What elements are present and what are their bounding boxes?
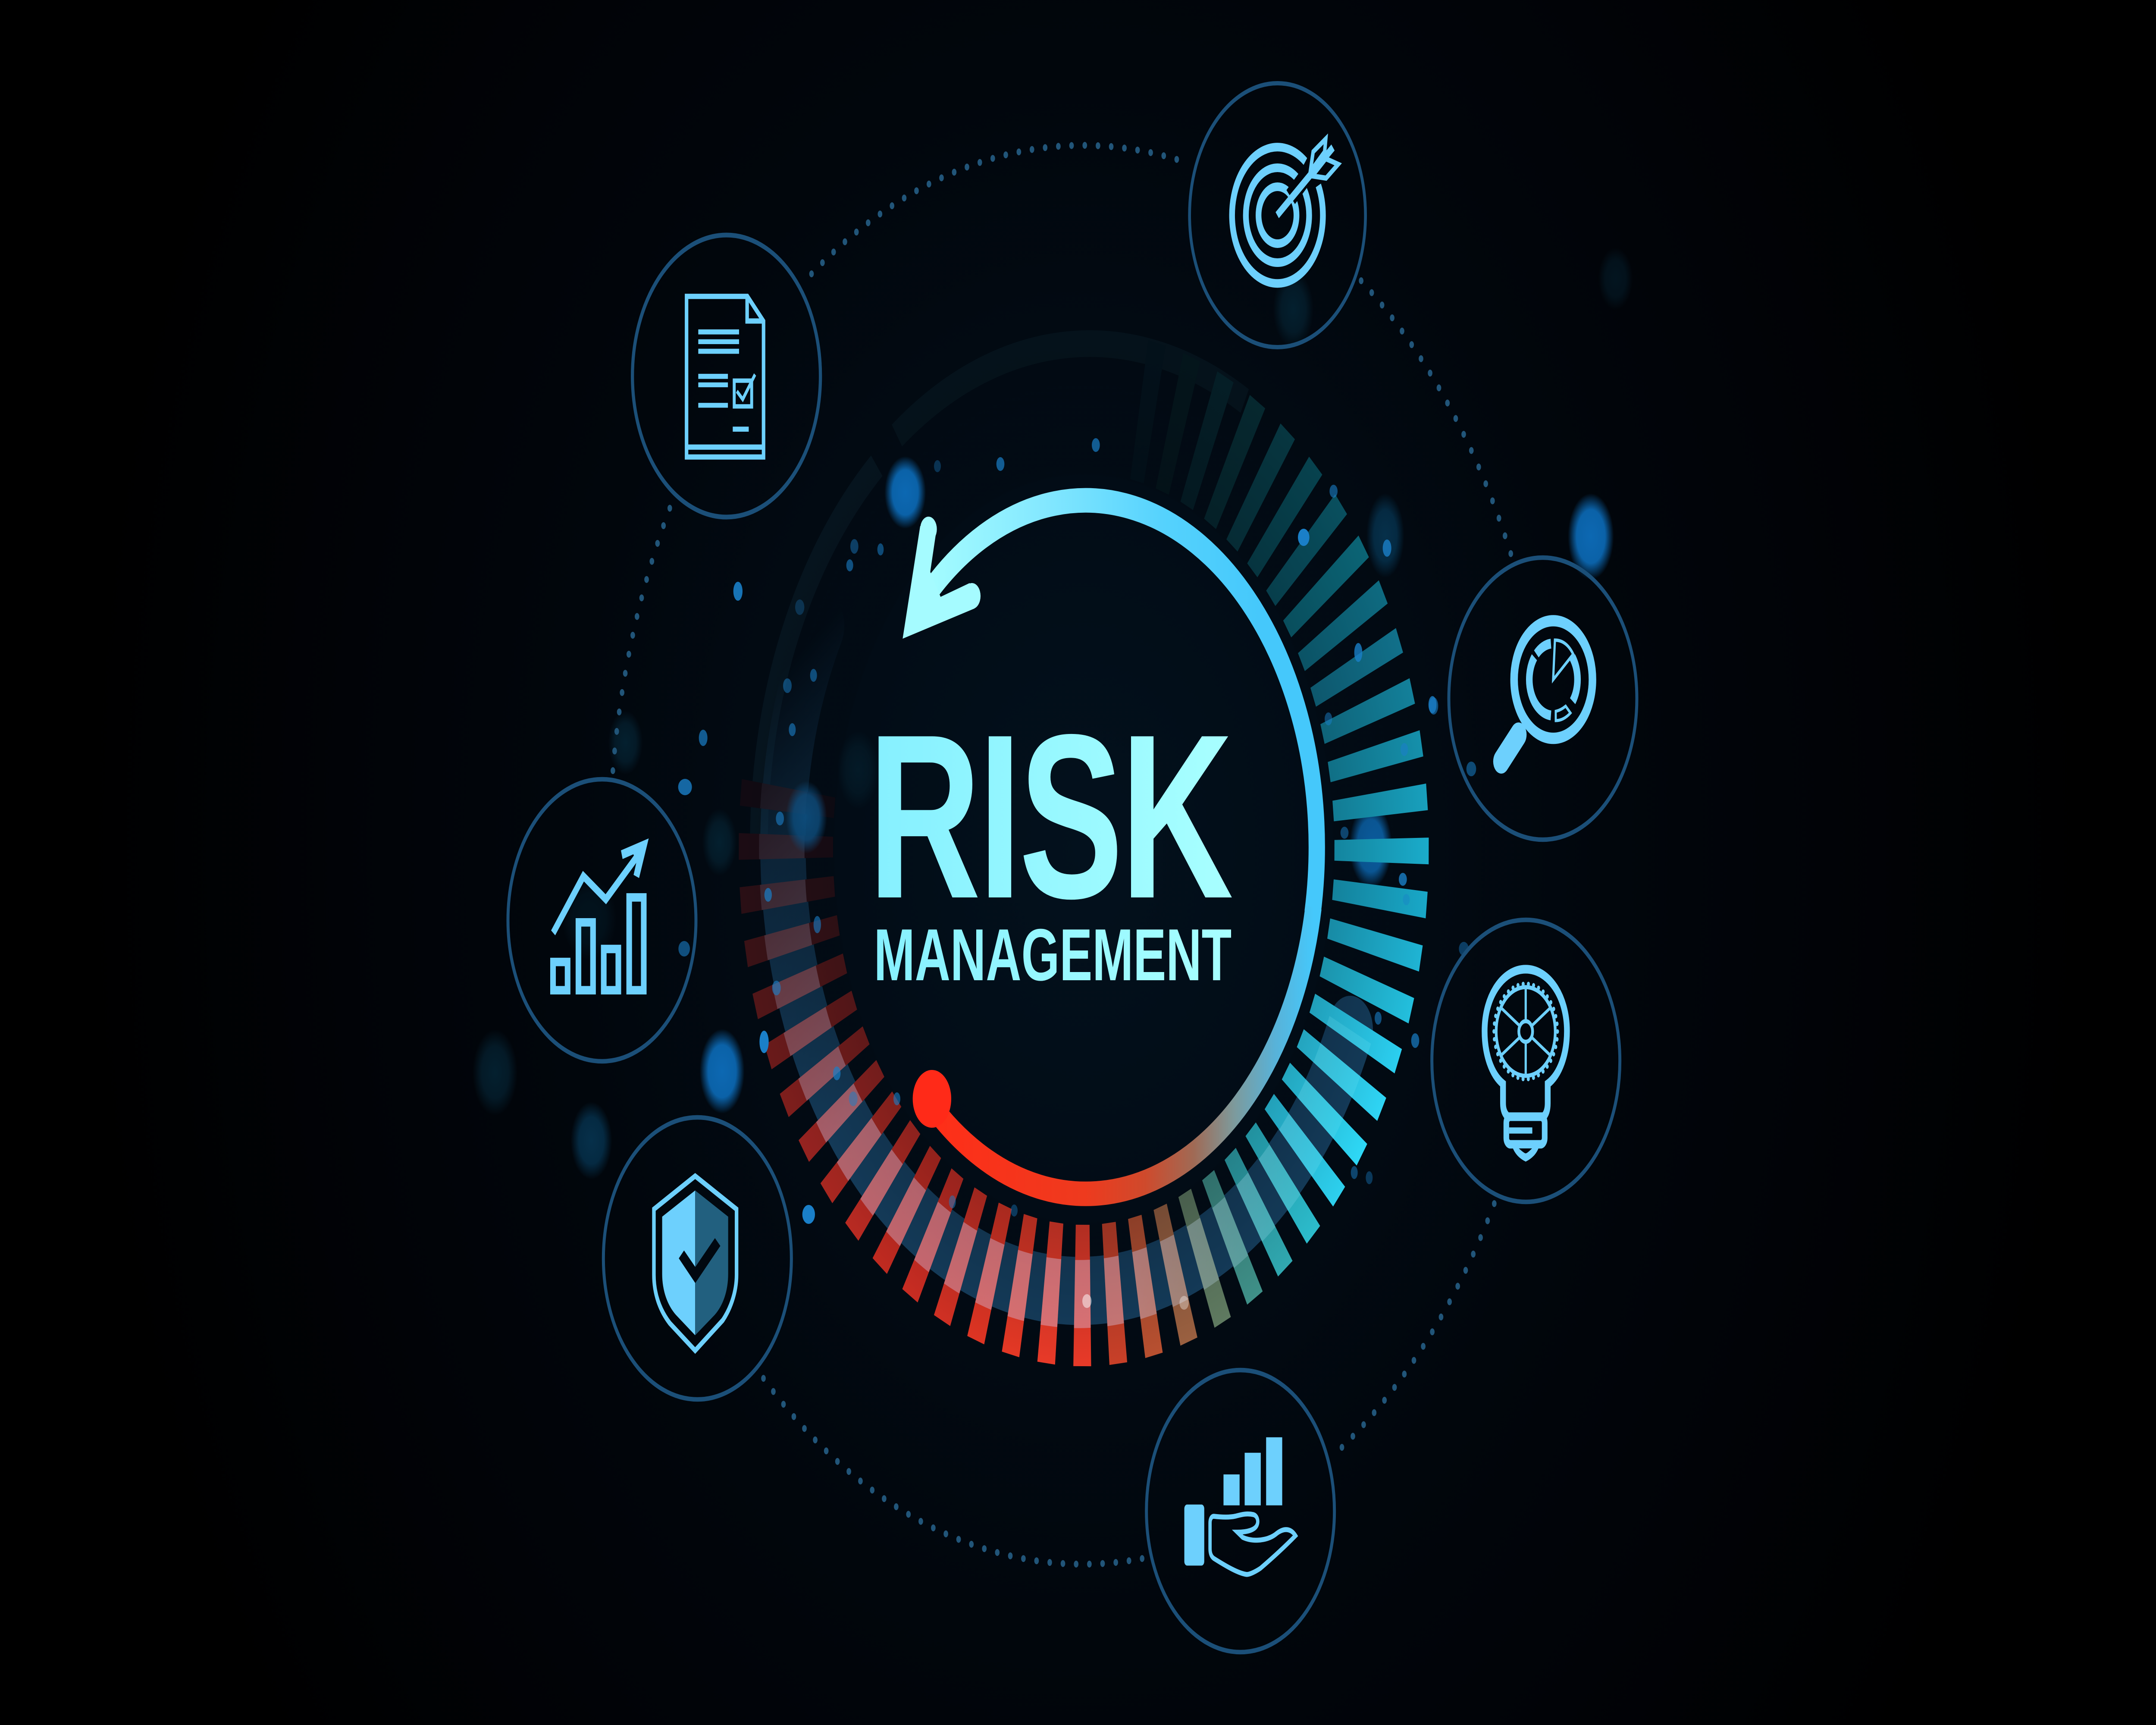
blue blob behind the right ticks <box>1349 803 1392 888</box>
arrowhead of the arc <box>903 517 981 639</box>
glow band highlight over the ticks <box>759 783 1371 1328</box>
radial gauge ticks <box>739 331 1429 1366</box>
icon: light bulb with gear <box>1432 920 1620 1202</box>
icon: document with checkbox <box>633 235 821 517</box>
subtitle: MANAGEMENT <box>874 913 1232 996</box>
dotted orbit arcs <box>613 145 1511 1564</box>
icon: target with arrow <box>1190 83 1366 347</box>
icon: hand holding bar chart <box>1147 1370 1335 1652</box>
icon: shield with check <box>603 1117 791 1399</box>
icon: rising bar chart with arrow <box>508 779 696 1061</box>
red end dot of the arc <box>913 1070 951 1128</box>
glow band under the ticks <box>783 626 1350 1291</box>
title: RISK <box>868 685 1233 947</box>
blue blobs <box>473 248 1633 1179</box>
faint background arcs <box>759 344 1245 849</box>
main circular gradient arc <box>925 500 1317 1194</box>
small particles <box>678 438 1476 1310</box>
icon: magnifier over pie chart <box>1449 558 1637 840</box>
